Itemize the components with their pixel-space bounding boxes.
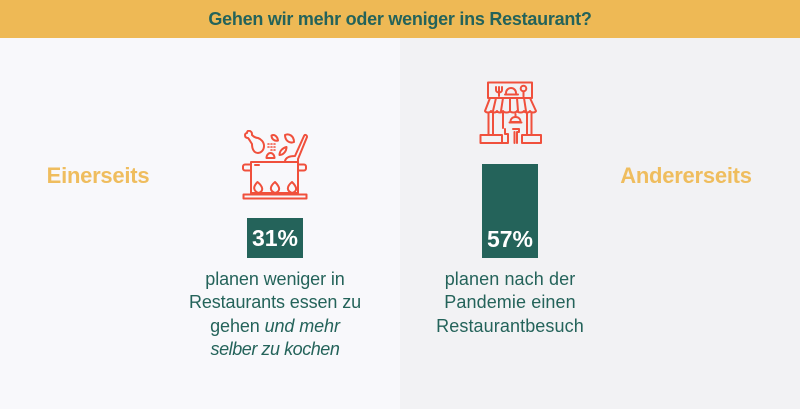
panel: right background — [400, 38, 800, 409]
bar: 31%: 31% — [252, 225, 298, 251]
text: right description: Pandemie einen — [444, 292, 576, 312]
title banner: Gehen wir mehr oder weniger ins Restaurant? — [208, 9, 592, 29]
bar: 31% — [247, 218, 303, 258]
bar: 57% — [482, 164, 538, 258]
text: left description: gehen und mehr — [210, 316, 340, 336]
icon: cooking pot — [242, 130, 308, 200]
bar: 57%: 57% — [487, 226, 533, 252]
text: left description — [189, 269, 361, 359]
title banner — [0, 0, 800, 38]
text: right description — [436, 269, 584, 336]
heading: Andererseits: Andererseits — [620, 163, 752, 188]
text: left description: Restaurants essen zu — [189, 292, 361, 312]
icon: restaurant storefront — [480, 82, 542, 144]
text: left description: selber zu kochen — [211, 339, 339, 359]
heading: Einerseits: Einerseits — [47, 163, 149, 188]
text: left description: planen weniger in — [205, 269, 345, 289]
text: right description: Restaurantbesuch — [436, 316, 584, 336]
text: right description: planen nach der — [445, 269, 575, 289]
